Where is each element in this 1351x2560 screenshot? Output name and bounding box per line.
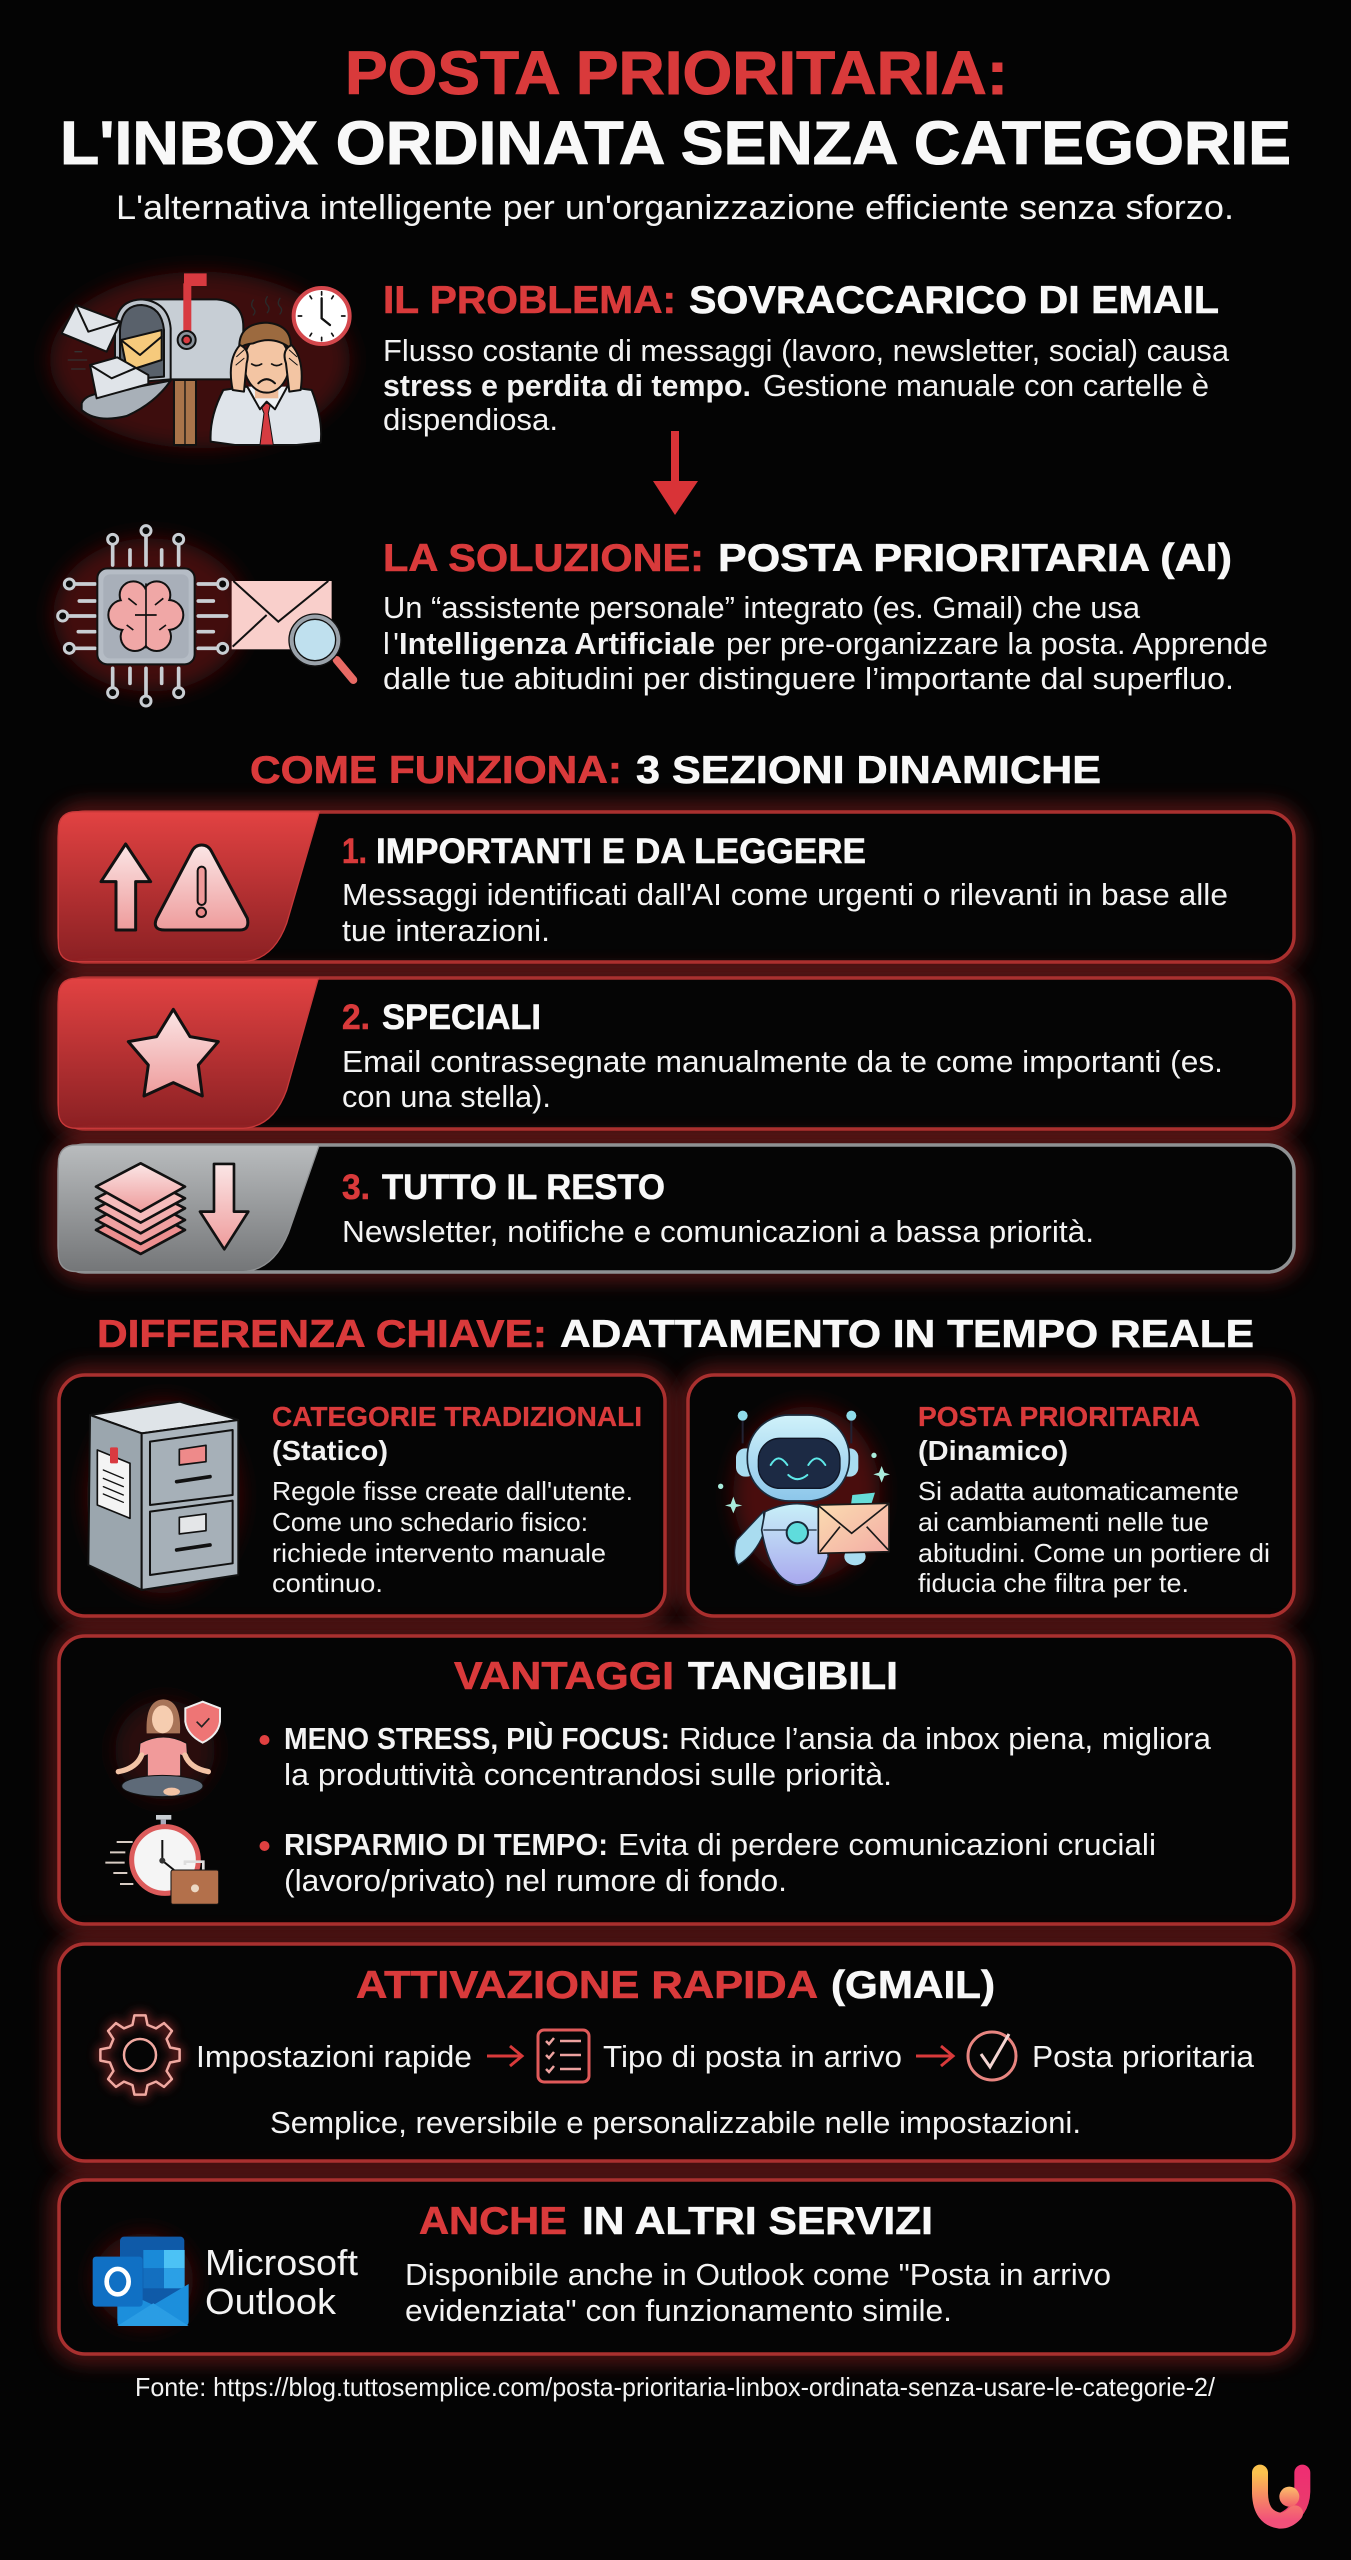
bullet 1: la produttività concentrandosi sulle priorità. [284, 1758, 892, 1792]
text block [405, 2258, 1111, 2328]
panel: vantaggi tangibili [59, 1636, 1294, 1924]
text block: soluzione: Intelligenza Artificiale [399, 627, 715, 661]
subtitle: L'alternativa intelligente per un'organizzazione efficiente senza sforzo. [116, 189, 1234, 227]
heading: la soluzione: POSTA PRIORITARIA (AI) [718, 537, 1232, 580]
logo [1260, 2473, 1302, 2521]
bullet 2 [260, 1828, 1156, 1898]
bullet 2: Evita di perdere comunicazioni cruciali [618, 1828, 1156, 1862]
text block: soluzione [383, 591, 1268, 696]
brand name: Outlook [205, 2281, 337, 2322]
source: Fonte: https://blog.tuttosemplice.com/posta-prioritaria-linbox-ordinata-senza-usare-le-categorie-2/ [135, 2372, 1216, 2402]
heading: il problema [383, 279, 1219, 322]
step 3 label: Posta prioritaria [1032, 2040, 1254, 2074]
text block: abitudini. Come un portiere di [918, 1538, 1270, 1568]
icon: star [58, 978, 318, 1128]
text block: Newsletter, notifiche e comunicazioni a bassa priorità. [342, 1215, 1094, 1249]
text block: soluzione: dalle tue abitudini per distinguere l’importante dal superfluo. [383, 662, 1234, 696]
heading: TUTTO IL RESTO [382, 1168, 665, 1207]
icon: AI chip brain and envelope [53, 526, 353, 706]
text block: tue interazioni. [342, 914, 550, 948]
arrow down [653, 431, 698, 515]
text block [342, 878, 1228, 948]
brand name [205, 2242, 358, 2322]
heading: il problema: IL PROBLEMA: [383, 279, 676, 322]
icon: mailbox and stressed man [50, 272, 350, 448]
text block: Disponibile anche in Outlook come "Posta in arrivo [405, 2258, 1111, 2292]
text block [342, 1045, 1223, 1114]
text block: problema: Gestione manuale con cartelle è [763, 369, 1209, 403]
arrow [916, 2046, 953, 2066]
text block: Regole fisse create dall'utente. [272, 1476, 633, 1506]
step 2 label: Tipo di posta in arrivo [603, 2040, 902, 2074]
icon: stack and down arrow [58, 1145, 319, 1272]
icon: gear [100, 2015, 180, 2095]
heading: differenza chiave: ADATTAMENTO IN TEMPO REALE [560, 1313, 1254, 1356]
panel: categorie tradizionali [59, 1375, 665, 1616]
text block: problema [383, 334, 1229, 437]
title [60, 39, 1291, 177]
icon: check circle [968, 2032, 1016, 2080]
heading: differenza chiave: DIFFERENZA CHIAVE: [97, 1313, 547, 1356]
heading [419, 2200, 933, 2243]
heading: VANTAGGI [454, 1655, 674, 1698]
bullet 2: (lavoro/privato) nel rumore di fondo. [284, 1864, 787, 1898]
text block: con una stella). [342, 1080, 551, 1114]
text block: soluzione: l' [383, 627, 399, 661]
title line 1: POSTA PRIORITARIA: [345, 39, 1008, 107]
text block [918, 1476, 1270, 1598]
icon: checklist [538, 2030, 589, 2082]
title: CATEGORIE TRADIZIONALI [272, 1401, 642, 1432]
bullet 1: Riduce l’ansia da inbox piena, migliora [679, 1722, 1211, 1756]
heading: la soluzione: LA SOLUZIONE: [383, 537, 704, 580]
panel: posta prioritaria [688, 1375, 1294, 1616]
heading: come funziona [250, 749, 1101, 792]
bullet 1: MENO STRESS, PIÙ FOCUS: [284, 1720, 670, 1756]
text block: problema: stress e perdita di tempo. [383, 369, 751, 403]
icon: meditating person with shield [105, 1699, 220, 1904]
brand name: Microsoft [205, 2242, 358, 2283]
text block: Email contrassegnate manualmente da te come importanti (es. [342, 1045, 1223, 1079]
bullet 1 [260, 1720, 1211, 1792]
heading: (GMAIL) [831, 1964, 995, 2007]
note: Semplice, reversibile e personalizzabile nelle impostazioni. [270, 2106, 1081, 2140]
panel: altri servizi [59, 2180, 1294, 2354]
heading: come funziona: 3 SEZIONI DINAMICHE [636, 749, 1101, 792]
heading [454, 1655, 898, 1698]
icon: up arrow and warning triangle [58, 812, 319, 962]
heading: 3. [342, 1168, 370, 1207]
heading: differenza chiave [97, 1313, 1254, 1356]
title [272, 1401, 642, 1466]
title line 2: L'INBOX ORDINATA SENZA CATEGORIE [60, 109, 1291, 177]
text block: Si adatta automaticamente [918, 1476, 1239, 1506]
step 1 label: Impostazioni rapide [196, 2040, 472, 2074]
heading: 2. [342, 998, 370, 1037]
text block: continuo. [272, 1568, 383, 1598]
panel: section 3 [58, 1145, 1294, 1272]
heading: la soluzione [383, 537, 1232, 580]
text block: Messaggi identificati dall'AI come urgenti o rilevanti in base alle [342, 878, 1228, 912]
text block: soluzione: Un “assistente personale” integrato (es. Gmail) che usa [383, 591, 1140, 625]
text block: fiducia che filtra per te. [918, 1568, 1189, 1598]
text block: richiede intervento manuale [272, 1538, 606, 1568]
title: (Dinamico) [918, 1435, 1068, 1466]
icon: robot with envelope [718, 1407, 890, 1585]
text block [272, 1476, 633, 1598]
text block: soluzione: per pre-organizzare la posta. Apprende [726, 627, 1268, 661]
text block: ai cambiamenti nelle tue [918, 1507, 1209, 1537]
text block: Come uno schedario fisico: [272, 1507, 588, 1537]
text block: evidenziata" con funzionamento simile. [405, 2294, 952, 2328]
icon: filing cabinet [87, 1400, 240, 1593]
bullet 2: RISPARMIO DI TEMPO: [284, 1828, 608, 1862]
title: POSTA PRIORITARIA [918, 1401, 1200, 1432]
icon: outlook [93, 2233, 193, 2327]
heading: SPECIALI [382, 998, 541, 1037]
title [918, 1401, 1200, 1466]
text block: problema: Flusso costante di messaggi (lavoro, newsletter, social) causa [383, 334, 1229, 368]
panel: attivazione rapida [59, 1944, 1294, 2161]
heading: 1. [342, 832, 367, 871]
heading: TANGIBILI [688, 1655, 898, 1698]
arrow [487, 2046, 522, 2066]
heading: IN ALTRI SERVIZI [582, 2200, 933, 2243]
heading: IMPORTANTI E DA LEGGERE [376, 832, 866, 871]
title: (Statico) [272, 1435, 388, 1466]
heading: ATTIVAZIONE RAPIDA [356, 1964, 818, 2007]
text block: problema: dispendiosa. [383, 403, 558, 437]
heading: ANCHE [419, 2200, 567, 2243]
heading: il problema: SOVRACCARICO DI EMAIL [689, 279, 1219, 322]
heading: come funziona: COME FUNZIONA: [250, 749, 622, 792]
panel: section 2 [58, 978, 1294, 1129]
heading [356, 1964, 995, 2007]
panel: section 1 [58, 812, 1294, 962]
